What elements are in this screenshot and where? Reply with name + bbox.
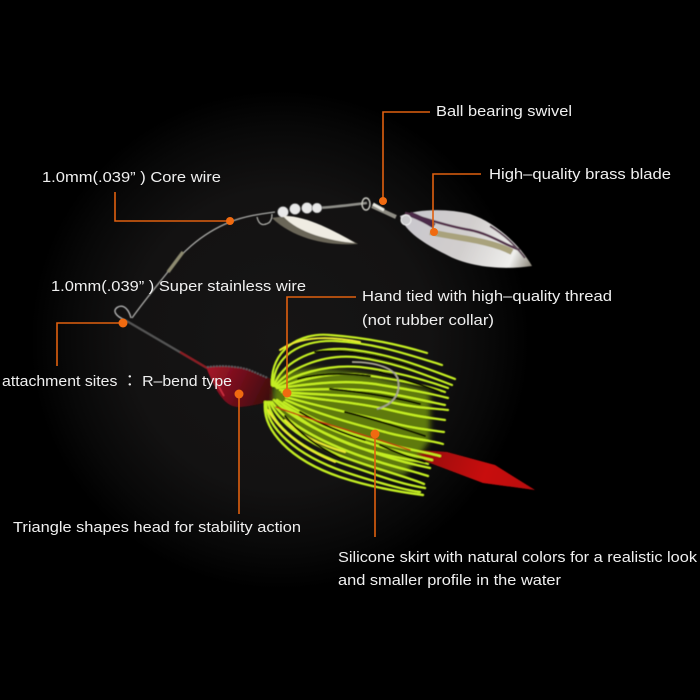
label: ball bearing swivel: Ball bearing swivel bbox=[436, 103, 572, 120]
label: brass blade: High–quality brass blade bbox=[489, 166, 671, 183]
large willow blade bbox=[400, 210, 532, 268]
triangle head bbox=[206, 366, 274, 407]
background glow bbox=[0, 80, 560, 600]
label: skirt line 1: Silicone skirt with natural colors for a realistic look bbox=[338, 549, 697, 566]
red thread streak bbox=[276, 407, 410, 450]
skirt mass bbox=[272, 369, 430, 475]
label: skirt line 2: and smaller profile in the water bbox=[338, 572, 561, 589]
swivel bbox=[362, 198, 396, 217]
label: stainless wire: 1.0mm(.039” ) Super stainless wire bbox=[51, 278, 306, 295]
leader: ball bearing swivel bbox=[379, 112, 430, 205]
leader: core wire bbox=[115, 192, 234, 225]
leader: skirt bbox=[370, 430, 380, 537]
upper strands bbox=[272, 335, 455, 464]
label: thread line 1: Hand tied with high–quality thread bbox=[362, 288, 612, 305]
label: attachment sites: attachment sites ： R–bend type bbox=[2, 373, 232, 390]
small blade bbox=[272, 216, 358, 244]
leader: attachment sites bbox=[57, 318, 128, 366]
leader: head bbox=[234, 390, 244, 514]
leader: brass blade bbox=[430, 174, 481, 236]
skirt bbox=[265, 335, 455, 495]
hook bbox=[352, 362, 399, 409]
label: core wire: 1.0mm(.039” ) Core wire bbox=[42, 169, 221, 186]
wire arm bbox=[132, 203, 367, 318]
dark streaks over skirt bbox=[285, 351, 440, 462]
label: triangle head: Triangle shapes head for stability action bbox=[13, 519, 301, 536]
yellow highlights bbox=[268, 338, 360, 462]
label: thread line 2: (not rubber collar) bbox=[362, 312, 494, 329]
leader: thread bbox=[282, 297, 356, 398]
attachment eye and lower wire bbox=[115, 306, 207, 368]
spinnerbait lure bbox=[115, 198, 535, 495]
lower strands bbox=[265, 400, 432, 495]
red tail bbox=[404, 449, 535, 490]
beads bbox=[278, 202, 322, 218]
